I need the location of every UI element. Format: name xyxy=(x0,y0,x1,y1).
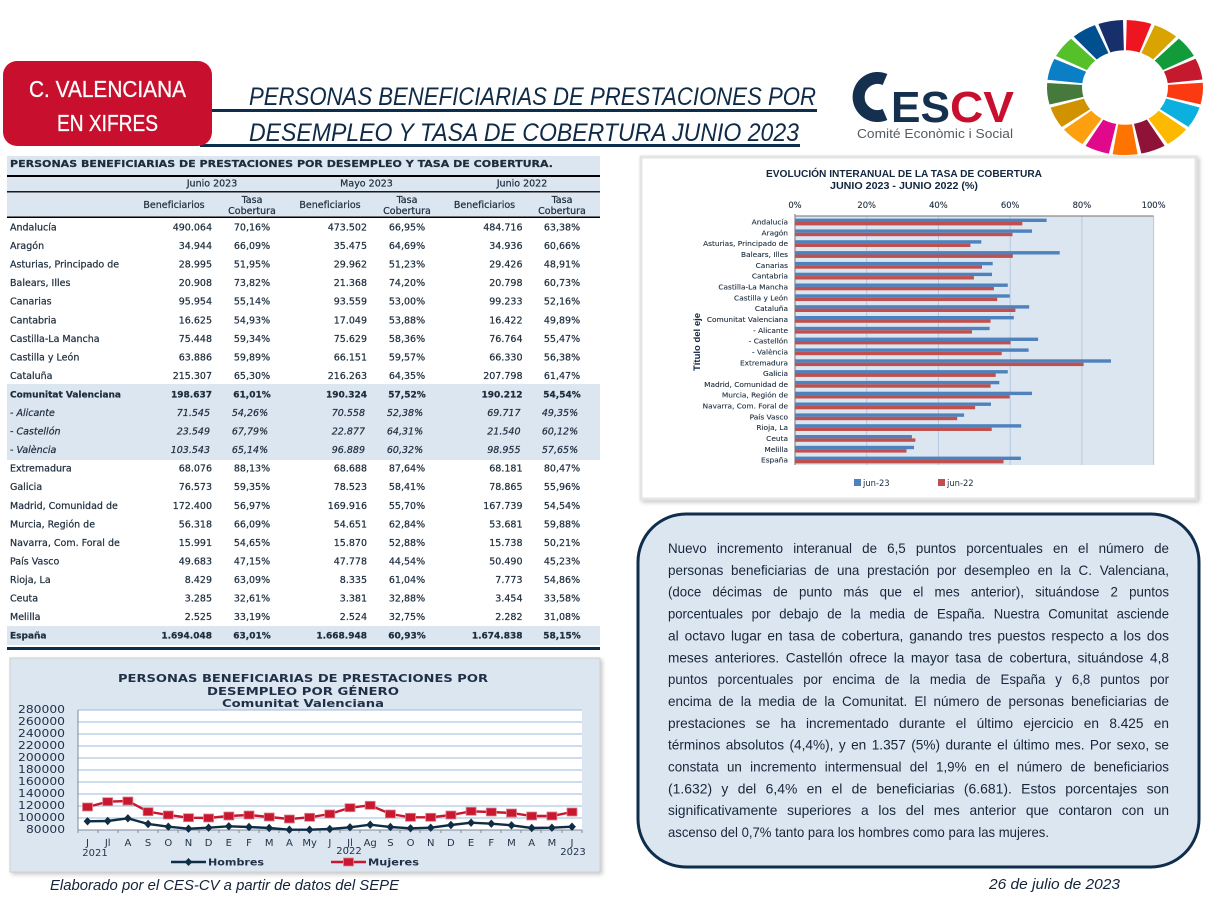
bar chart category labels: Castilla y León xyxy=(734,293,788,302)
bar chart legend: jun-23 xyxy=(862,478,890,488)
table rows: 53,00% xyxy=(389,297,425,308)
table rows: Extremadura xyxy=(10,464,72,475)
table rows: 60,73% xyxy=(544,278,580,289)
table rows: 190.324 xyxy=(326,390,367,400)
bar chart category labels: Andalucía xyxy=(752,218,788,227)
table rows: 93.559 xyxy=(334,297,367,308)
table rows: 49.683 xyxy=(179,556,212,567)
table rows: Navarra, Com. Foral de xyxy=(10,538,120,549)
table rows: 2.525 xyxy=(185,612,212,623)
line chart y axis labels xyxy=(18,704,65,836)
table rows: 54.651 xyxy=(334,519,367,530)
line chart x axis labels xyxy=(82,838,586,859)
title: PERSONAS BENEFICIARIAS DE PRESTACIONES POR xyxy=(249,83,816,111)
line chart y axis labels: 240000 xyxy=(18,728,65,740)
table rows: 78.523 xyxy=(334,482,367,493)
table rows: 33,58% xyxy=(544,594,580,604)
bar chart category labels: Asturias, Principado de xyxy=(703,239,788,248)
table rows: Castilla y León xyxy=(10,352,79,363)
table rows: 47.778 xyxy=(334,556,367,567)
series: jun-23 bars xyxy=(795,219,1111,460)
table rows: 20.798 xyxy=(489,278,522,289)
table rows: 66.151 xyxy=(334,352,367,363)
table rows: 3.454 xyxy=(495,594,522,604)
panel: commentary text: puntos porcentuales por encima de la media de España y 6,8 puntos por xyxy=(668,671,1169,687)
panel: commentary text: meses anteriores. Castellón ofrece la mayor tasa de cobertura, situándose 4,8 xyxy=(668,649,1169,665)
table rows: 52,88% xyxy=(389,538,425,549)
panel: commentary text: Nuevo incremento interanual de 6,5 puntos porcentuales en el número de xyxy=(668,540,1169,556)
line chart x axis labels: A xyxy=(286,838,293,849)
table rows: 54,93% xyxy=(234,315,270,326)
table rows: 32,61% xyxy=(234,594,270,604)
panel: commentary text: significativamente superiores a los del mes anterior que contaron con un xyxy=(668,802,1169,818)
line chart y axis labels: 280000 xyxy=(18,704,65,716)
bar chart plot area xyxy=(795,214,1154,465)
line chart x axis labels: F xyxy=(246,838,252,849)
table rows: 59,35% xyxy=(234,482,270,493)
line chart legend: Mujeres xyxy=(368,858,419,868)
table rows: 70.558 xyxy=(332,408,365,419)
line chart y axis labels: 100000 xyxy=(18,812,65,824)
bar chart category labels: Cantabria xyxy=(752,272,788,281)
panel: commentary text: (1.632) y del 6,4% en el de beneficiarias (6.681). Estos porcentajes son xyxy=(668,780,1169,796)
table rows: 56.318 xyxy=(179,519,212,530)
line chart y axis labels: 220000 xyxy=(18,740,65,752)
table rows: 32,75% xyxy=(389,612,425,623)
bar chart legend xyxy=(854,478,974,488)
panel: commentary text: ascenso del 0,7% tanto para los hombres como para las mujeres. xyxy=(668,824,1049,840)
table rows: 68.688 xyxy=(334,464,367,475)
table rows: 2.524 xyxy=(340,612,367,623)
table rows: Asturias, Principado de xyxy=(10,260,119,271)
series: Mujeres xyxy=(82,797,577,823)
bar chart legend: jun-22 xyxy=(946,478,974,488)
logo: CES-CV: Comité Econòmic i Social xyxy=(857,126,1013,141)
table rows: 51,23% xyxy=(389,260,425,271)
table rows: 50,21% xyxy=(544,538,580,549)
table rows: - Alicante xyxy=(10,408,55,419)
panel: commentary text: (doce décimas de punto más que el mes anterior), situándose 2 puntos xyxy=(668,584,1169,600)
title xyxy=(200,83,817,147)
line chart legend xyxy=(171,858,419,868)
table rows: 66,09% xyxy=(234,519,270,530)
panel: commentary text: al octavo lugar en tasa de cobertura, ganando tres puestos respecto a los dos xyxy=(668,627,1169,643)
table rows: 190.212 xyxy=(482,390,522,400)
table rows: 216.263 xyxy=(328,371,367,382)
bar chart category labels: Comunitat Valenciana xyxy=(707,315,788,324)
table rows: 21.368 xyxy=(334,278,367,289)
table rows: 60,93% xyxy=(388,632,426,642)
line chart title xyxy=(118,672,489,710)
table rows: 1.674.838 xyxy=(472,632,522,642)
bar chart category labels: Balears, Illes xyxy=(741,250,788,259)
logo: CES-CV xyxy=(857,78,1015,141)
line chart legend: Hombres xyxy=(208,858,264,868)
table rows: 103.543 xyxy=(171,445,210,456)
table rows: 172.400 xyxy=(173,501,212,512)
table rows: 55,70% xyxy=(389,501,425,512)
table rows: 54,86% xyxy=(544,575,580,586)
axis title: Título del eje xyxy=(692,313,703,371)
line chart x axis labels: M xyxy=(548,838,556,849)
table rows: 55,47% xyxy=(544,334,580,345)
bar chart category labels: - Alicante xyxy=(753,326,788,335)
table rows: 16.625 xyxy=(179,315,212,326)
line chart x axis labels: E xyxy=(226,838,232,849)
table rows: Ceuta xyxy=(10,594,38,604)
bar chart category labels: País Vasco xyxy=(750,412,788,421)
table column headers: Cobertura xyxy=(538,206,586,217)
table rows: 47,15% xyxy=(234,556,270,567)
table rows: Rioja, La xyxy=(10,575,51,586)
table rows: España xyxy=(10,632,47,642)
table rows: 3.381 xyxy=(340,594,367,604)
table rows: 59,57% xyxy=(389,352,425,363)
panel: commentary text: encima de la media de la Comunitat. El número de personas beneficiarias de xyxy=(668,693,1169,709)
table rows: Aragón xyxy=(10,241,44,252)
table rows: 17.049 xyxy=(334,315,367,326)
table rows: 64,69% xyxy=(389,241,425,252)
table rows: 8.429 xyxy=(185,575,212,586)
table rows: Comunitat Valenciana xyxy=(10,390,121,400)
bar chart category labels: Murcia, Región de xyxy=(722,391,788,400)
bar chart category labels xyxy=(703,218,788,465)
line chart x axis labels: 2022 xyxy=(336,846,362,857)
table rows: Balears, Illes xyxy=(10,278,70,289)
table column headers: Beneficiarios xyxy=(143,200,205,211)
table rows: 98.955 xyxy=(487,445,520,456)
date: 26 de julio de 2023 xyxy=(988,877,1120,893)
table column headers xyxy=(143,178,586,217)
table rows: 49,35% xyxy=(542,408,578,419)
table rows: 1.668.948 xyxy=(316,632,367,642)
badge: C. Valenciana en xifres: C. VALENCIANA xyxy=(29,76,187,102)
table rows: 22.877 xyxy=(332,427,365,438)
line chart x axis labels: N xyxy=(427,838,434,849)
table column headers: Beneficiarios xyxy=(299,200,361,211)
table rows: 60,66% xyxy=(544,241,580,252)
line chart y axis labels: 120000 xyxy=(18,800,65,812)
bar chart title: EVOLUCIÓN INTERANUAL DE LA TASA DE COBERTURA xyxy=(766,167,1042,180)
icon: SDG colour wheel xyxy=(1046,19,1204,155)
table rows: 60,32% xyxy=(387,445,423,456)
table rows: 59,88% xyxy=(544,519,580,530)
table rows: 58,15% xyxy=(543,632,581,642)
panel: commentary text xyxy=(638,514,1199,867)
bar chart category labels: Melilla xyxy=(764,445,788,454)
table rows: 52,38% xyxy=(387,408,423,419)
table rows: 20.908 xyxy=(179,278,212,289)
table rows: 57,65% xyxy=(542,445,578,456)
table rows: 44,54% xyxy=(389,556,425,567)
bar chart category labels: Castilla-La Mancha xyxy=(718,282,788,292)
table rows: 2.282 xyxy=(495,612,522,623)
table rows: 29.962 xyxy=(334,260,367,271)
bar chart x axis labels: 100% xyxy=(1142,200,1166,210)
table rows: 473.502 xyxy=(328,222,367,234)
table rows: Cantabria xyxy=(10,315,56,326)
table rows: 15.870 xyxy=(334,538,367,549)
table rows: 71.545 xyxy=(177,408,210,419)
source note: Elaborado por el CES-CV a partir de datos del SEPE xyxy=(50,878,399,894)
table rows: 65,30% xyxy=(234,371,270,382)
line chart x axis labels: E xyxy=(468,838,474,849)
table rows: 167.739 xyxy=(483,501,522,512)
table rows: 215.307 xyxy=(173,371,212,382)
line chart y axis labels: 140000 xyxy=(18,788,65,800)
table rows: 65,14% xyxy=(232,445,268,456)
line chart x axis labels: M xyxy=(507,838,516,849)
table rows: 66.330 xyxy=(489,352,522,363)
table rows: 8.335 xyxy=(340,575,367,586)
table column headers: Junio 2022 xyxy=(496,178,547,190)
table rows: 29.426 xyxy=(489,260,522,271)
table rows: 59,34% xyxy=(234,334,270,345)
bar chart category labels: Canarias xyxy=(756,261,788,270)
bar chart category labels: Ceuta xyxy=(766,434,788,443)
table rows: 34.944 xyxy=(179,241,212,252)
table rows: Galicia xyxy=(10,482,42,493)
table rows: 62,84% xyxy=(389,519,425,530)
table rows: 63.886 xyxy=(179,352,212,363)
table rows: 58,41% xyxy=(389,482,425,493)
series: jun-22 bars xyxy=(795,222,1084,463)
table rows: 58,36% xyxy=(389,334,425,345)
bar chart x axis labels: 0% xyxy=(788,200,802,210)
table column headers: Tasa xyxy=(396,195,417,206)
table rows: 64,31% xyxy=(387,427,423,438)
bar chart category labels: Galicia xyxy=(763,369,788,378)
line chart title: PERSONAS BENEFICIARIAS DE PRESTACIONES POR xyxy=(118,672,489,685)
bar chart category labels: Madrid, Comunidad de xyxy=(704,380,788,389)
table rows: Madrid, Comunidad de xyxy=(10,501,118,512)
bar chart category labels: - València xyxy=(752,347,788,356)
table rows: 75.448 xyxy=(179,334,212,345)
line chart x axis labels: J xyxy=(85,838,89,849)
table rows: 63,09% xyxy=(234,575,270,586)
line chart x axis labels: 2021 xyxy=(82,848,108,859)
bar chart x axis labels: 60% xyxy=(1001,200,1020,210)
table rows: 21.540 xyxy=(487,427,520,438)
table rows: 78.865 xyxy=(489,482,522,493)
bar chart category labels: España xyxy=(761,456,788,465)
table rows: 80,47% xyxy=(544,464,580,475)
line chart x axis labels: A xyxy=(124,838,131,849)
line chart x axis labels: My xyxy=(302,838,317,849)
panel: commentary text: personas beneficiarias de una prestación por desempleo en la C. Valenciana, xyxy=(668,562,1169,578)
table rows: - Castellón xyxy=(10,427,61,438)
line chart x axis labels: M xyxy=(265,838,274,849)
bar chart title: JUNIO 2023 - JUNIO 2022 (%) xyxy=(830,180,978,192)
table rows: 169.916 xyxy=(328,501,367,512)
table rows: 45,23% xyxy=(544,556,580,567)
table rows: 61,04% xyxy=(389,575,425,586)
line chart x axis labels: S xyxy=(387,838,394,849)
bar chart x axis labels: 80% xyxy=(1073,200,1091,210)
line chart x axis labels: N xyxy=(185,838,192,849)
line chart x axis labels: D xyxy=(447,838,455,849)
table rows: 53,88% xyxy=(389,315,425,326)
line chart plot area xyxy=(78,710,582,833)
table rows: 70,16% xyxy=(234,222,270,234)
table rows: Canarias xyxy=(10,297,52,308)
table rows: 73,82% xyxy=(234,278,270,289)
line chart x axis labels: J xyxy=(327,838,331,849)
table rows: 99.233 xyxy=(489,297,522,308)
table rows: 23.549 xyxy=(177,427,210,438)
line chart x axis labels: A xyxy=(528,838,535,849)
line chart x axis labels: F xyxy=(488,838,494,849)
line chart y axis labels: 180000 xyxy=(18,764,65,776)
table rows: Murcia, Región de xyxy=(10,519,95,530)
table rows: 63,01% xyxy=(233,632,271,642)
bar chart category labels: Navarra, Com. Foral de xyxy=(703,402,788,410)
line chart x axis labels: O xyxy=(164,838,172,849)
bar chart category labels: Aragón xyxy=(761,228,788,237)
table rows: País Vasco xyxy=(10,556,59,567)
bar chart category labels: - Castellón xyxy=(749,337,788,346)
table rows: 15.738 xyxy=(489,538,522,549)
table rows: 32,88% xyxy=(389,594,425,604)
table rows: 88,13% xyxy=(234,464,270,475)
panel: commentary text: prestaciones se ha incrementado durante el último ejercicio en 8.425 en xyxy=(668,715,1169,731)
bar chart x axis labels xyxy=(788,200,1166,210)
line chart x axis labels: O xyxy=(407,838,415,849)
line chart x axis labels: Jl xyxy=(104,838,111,849)
table rows: 28.995 xyxy=(179,260,212,271)
panel: data table xyxy=(7,156,600,650)
table heading: PERSONAS BENEFICIARIAS DE PRESTACIONES POR DESEMPLEO Y TASA DE COBERTURA. xyxy=(10,159,553,170)
table column headers: Tasa xyxy=(551,195,572,206)
line chart x axis labels: Ag xyxy=(364,838,377,849)
table rows: 59,89% xyxy=(234,352,270,363)
table rows: 50.490 xyxy=(489,556,522,567)
line chart x axis labels: Jl xyxy=(346,838,353,849)
table rows: 3.285 xyxy=(185,594,212,604)
badge: C. Valenciana en xifres: EN XIFRES xyxy=(57,110,158,136)
table rows: 61,47% xyxy=(544,371,580,382)
table rows: 56,38% xyxy=(544,352,580,363)
bar chart category labels: Cataluña xyxy=(755,304,788,313)
table rows: 76.764 xyxy=(489,334,522,345)
bar chart x axis labels: 20% xyxy=(857,200,876,210)
table rows: 54,26% xyxy=(232,408,268,419)
line chart title: DESEMPLEO POR GÉNERO xyxy=(207,685,399,698)
table rows: 96.889 xyxy=(332,445,365,456)
table column headers: Junio 2023 xyxy=(186,178,237,190)
table rows: 51,95% xyxy=(234,260,270,271)
table rows: 1.694.048 xyxy=(161,632,212,642)
table rows xyxy=(10,222,581,642)
table rows: 490.064 xyxy=(173,222,212,234)
table rows: 54,54% xyxy=(544,501,580,512)
panel: commentary text: constata un incremento intermensual del 1,9% en el número de beneficiarios xyxy=(668,758,1169,774)
table rows: 68.181 xyxy=(489,464,522,475)
line chart y axis labels: 80000 xyxy=(26,824,65,836)
logo: CES-CV: CV xyxy=(950,83,1015,132)
badge: C. Valenciana en xifres xyxy=(3,61,212,146)
table rows: 31,08% xyxy=(544,612,580,623)
line chart x axis labels: 2023 xyxy=(560,847,586,858)
table column headers: Mayo 2023 xyxy=(340,178,393,190)
table rows: 74,20% xyxy=(389,278,425,289)
line chart y axis labels: 200000 xyxy=(18,752,65,764)
panel: commentary text: términos absolutos (4,4%), y en 1.357 (5%) durante el último mes. Por sexo, se xyxy=(668,737,1169,753)
table rows: 54,54% xyxy=(543,390,581,400)
table rows: 60,12% xyxy=(542,427,578,438)
table rows: 49,89% xyxy=(544,315,580,326)
line chart x axis labels: S xyxy=(145,838,151,849)
line chart x axis labels: D xyxy=(205,838,213,849)
line chart y axis labels: 260000 xyxy=(18,716,65,728)
bar chart x axis labels: 40% xyxy=(929,200,948,210)
bar chart category labels: Extremadura xyxy=(740,358,788,367)
table rows: 63,38% xyxy=(544,222,580,234)
table rows: 55,14% xyxy=(234,297,270,308)
bar chart title xyxy=(766,167,1042,192)
table rows: Andalucía xyxy=(10,222,57,234)
line chart x axis labels: J xyxy=(570,838,573,849)
table rows: 68.076 xyxy=(179,464,212,475)
logo: CES-CV: ES xyxy=(891,83,950,132)
table rows: 52,16% xyxy=(544,297,580,308)
table rows: Melilla xyxy=(10,612,40,623)
table rows: 15.991 xyxy=(179,538,212,549)
table rows: 55,96% xyxy=(544,482,580,493)
table rows: 484.716 xyxy=(483,222,522,234)
table column headers: Cobertura xyxy=(228,206,276,217)
panel: bar chart coverage rate xyxy=(641,157,1196,499)
table rows: 53.681 xyxy=(489,519,522,530)
table rows: 54,65% xyxy=(234,538,270,549)
table rows: 61,01% xyxy=(233,390,271,400)
table rows: 67,79% xyxy=(232,427,268,438)
panel: line chart by gender xyxy=(10,658,600,872)
table rows: 57,52% xyxy=(388,390,426,400)
table column headers: Tasa xyxy=(241,195,262,206)
table rows: 66,09% xyxy=(234,241,270,252)
line chart y axis labels: 160000 xyxy=(18,776,65,788)
table column headers: Cobertura xyxy=(383,206,431,217)
table rows: 16.422 xyxy=(489,315,522,326)
table rows: 76.573 xyxy=(179,482,212,493)
title: DESEMPLEO Y TASA DE COBERTURA JUNIO 2023 xyxy=(249,119,799,147)
table rows: 56,97% xyxy=(234,501,270,512)
table rows: 34.936 xyxy=(489,241,522,252)
table rows: 7.773 xyxy=(495,575,522,586)
series: Hombres xyxy=(88,818,572,830)
table rows: 198.637 xyxy=(171,390,212,400)
table rows: 33,19% xyxy=(234,612,270,623)
table rows: 75.629 xyxy=(334,334,367,345)
table rows: 48,91% xyxy=(544,260,580,271)
bar chart category labels: Rioja, La xyxy=(756,423,788,432)
table rows: 207.798 xyxy=(483,371,522,382)
table rows: 87,64% xyxy=(389,464,425,475)
table rows: 64,35% xyxy=(389,371,425,382)
table rows: Castilla-La Mancha xyxy=(10,334,100,345)
line chart title: Comunitat Valenciana xyxy=(222,697,384,710)
table rows: - València xyxy=(10,445,57,456)
table column headers: Beneficiarios xyxy=(454,200,515,211)
table rows: 69.717 xyxy=(487,408,520,419)
table rows: 35.475 xyxy=(334,241,367,252)
table rows: Cataluña xyxy=(10,371,53,382)
table rows: 95.954 xyxy=(179,297,212,308)
table rows: 66,95% xyxy=(389,222,425,234)
panel: commentary text: porcentuales por debajo de la media de España. Nuestra Comunitat asciende xyxy=(668,606,1169,622)
